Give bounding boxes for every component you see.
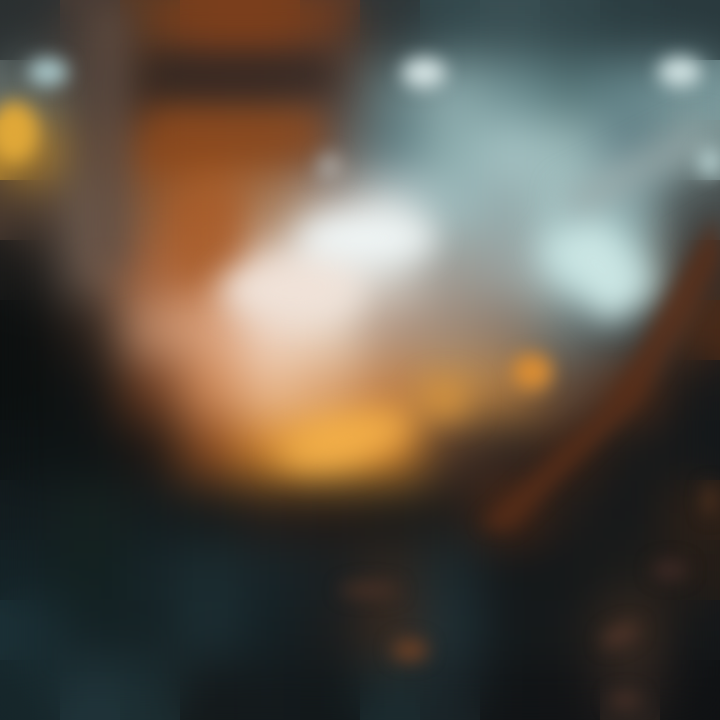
- pale teal light patch: [540, 125, 710, 325]
- upper structure: orange-brown ceiling bands: [92, 4, 340, 280]
- fire core: [274, 384, 467, 476]
- orange hot spot: [512, 354, 552, 390]
- lights: ceiling lamps: [28, 57, 720, 182]
- rubble embers: [340, 484, 716, 707]
- right diagonal beam: [480, 215, 720, 530]
- left glow: [0, 102, 38, 162]
- white cloud highlight: [220, 214, 435, 320]
